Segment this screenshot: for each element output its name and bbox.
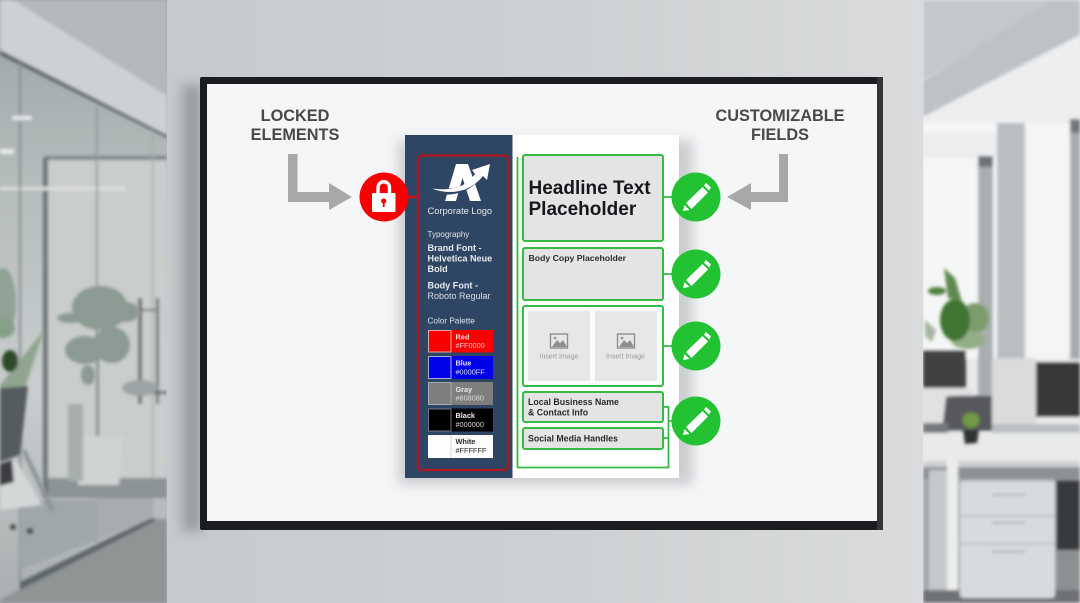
swatch: gray [428, 382, 493, 405]
typography block [428, 230, 492, 301]
swatch: blue: Blue [456, 358, 471, 368]
swatch: black: #000000 [456, 420, 484, 429]
background: right office [923, 0, 1080, 603]
field: local business [523, 392, 663, 422]
icon: red lock [360, 172, 408, 222]
icon: pencil 3 [672, 322, 720, 370]
logo [432, 164, 490, 201]
swatch: gray: #808080 [456, 394, 484, 402]
swatch: gray: Gray [456, 385, 473, 394]
red locked outline [418, 156, 508, 470]
field: local business: & Contact Info [528, 408, 589, 418]
typography block: Bold [428, 264, 448, 274]
field: body copy [523, 248, 663, 300]
field: body copy: Body Copy Placeholder [528, 253, 627, 263]
swatch: red: #FF0000 [456, 341, 485, 350]
poster [405, 135, 679, 478]
typography block: Body Font - [428, 280, 478, 290]
color palette heading: Color Palette [428, 316, 475, 326]
swatch: white: #FFFFFF [456, 446, 487, 455]
field: headline: Headline Text [528, 178, 651, 199]
heading: customizable fields: FIELDS [751, 126, 809, 144]
display screen frame [200, 77, 883, 530]
panel: locked brand column [405, 135, 512, 478]
swatch: white [428, 435, 493, 458]
field: local business: Local Business Name [528, 397, 619, 407]
icon: pencil 4 [672, 396, 720, 446]
background: glass tree [57, 286, 140, 385]
arrow: to pencil [727, 154, 788, 210]
field: social [523, 428, 663, 449]
swatch: white: White [456, 437, 475, 446]
typography block: Brand Font - [428, 243, 482, 253]
background: left glass office [0, 0, 167, 603]
heading: locked elements: ELEMENTS [251, 126, 339, 144]
swatch: black: Black [456, 411, 476, 420]
swatch: blue [428, 356, 493, 379]
heading: locked elements [251, 107, 339, 144]
arrow: to lock [288, 154, 352, 210]
connector lines [663, 197, 672, 346]
heading: locked elements: LOCKED [261, 107, 330, 125]
icon: pencil 1 [672, 172, 720, 222]
label: corporate logo: Corporate Logo [428, 206, 492, 216]
swatch: black [428, 408, 493, 432]
green bracket [518, 157, 672, 468]
typography block: Helvetica Neue [428, 254, 492, 264]
icon: pencil 2 [672, 250, 720, 298]
field: headline [523, 155, 663, 241]
field: social: Social Media Handles [528, 434, 618, 444]
image placeholder right: Insert Image [606, 354, 645, 360]
typography block: Roboto Regular [428, 291, 491, 301]
field: images [523, 306, 663, 386]
typography block: Typography [428, 230, 469, 239]
screen shadow [182, 84, 202, 532]
background: left plant and chair [0, 268, 55, 534]
image placeholder left: Insert Image [540, 354, 579, 360]
field: headline: Placeholder [528, 199, 637, 220]
heading: customizable fields [715, 107, 845, 144]
swatch: blue: #0000FF [456, 368, 485, 376]
heading: customizable fields: CUSTOMIZABLE [715, 107, 845, 125]
background: right plant [925, 268, 989, 444]
poster shadow [398, 140, 693, 485]
swatch: red: Red [456, 332, 469, 342]
swatch: red [428, 330, 493, 352]
background: wall [167, 0, 923, 603]
red connector [406, 196, 418, 198]
